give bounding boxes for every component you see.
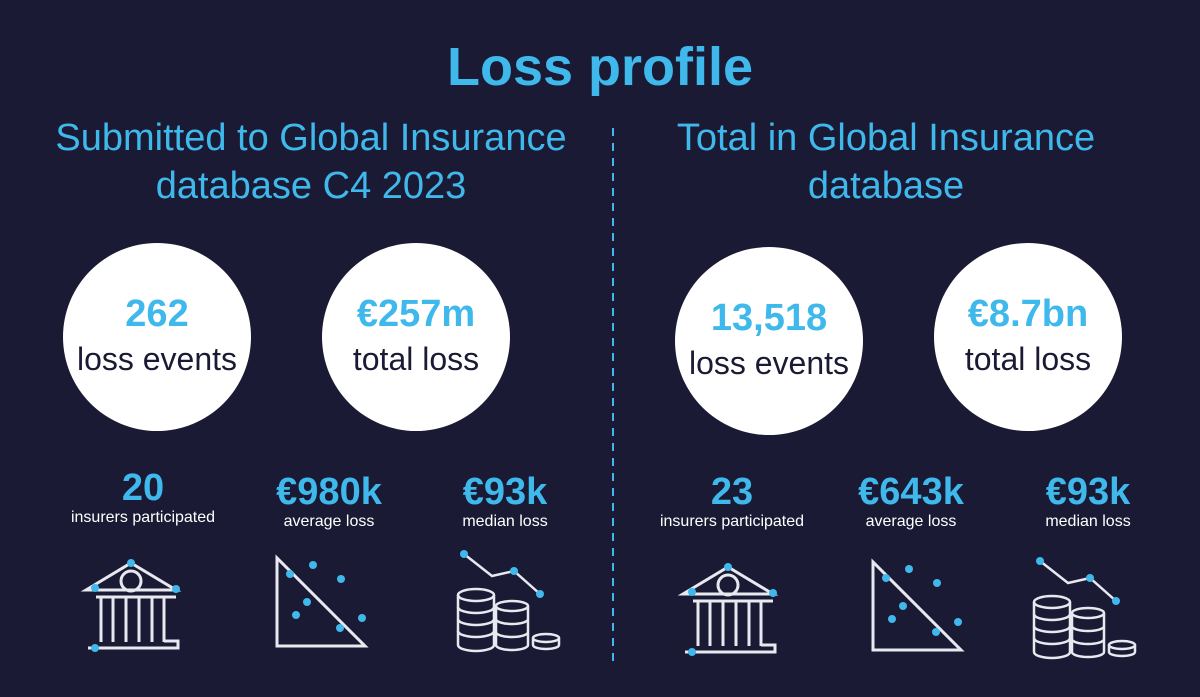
stat: 23 insurers <box>660 471 804 530</box>
circle: 262 loss events: loss events <box>77 341 237 377</box>
stat: €93k median: €93k <box>463 471 547 513</box>
subtitle left <box>55 117 567 207</box>
subtitle right <box>677 117 1095 207</box>
stat: €643k average: average loss <box>866 513 956 530</box>
stat: 20 insurers: insurers participated <box>71 509 215 526</box>
icon: coins right <box>1034 557 1135 658</box>
circle: 13,518 loss events <box>675 247 863 435</box>
icon: triangle scatter left <box>277 558 366 646</box>
title: Loss profile <box>447 37 753 97</box>
circle: €257m total loss <box>322 243 510 431</box>
circle: 262 loss events <box>63 243 251 431</box>
stat: €980k average: €980k <box>276 471 382 513</box>
stat: 20 insurers <box>71 467 215 526</box>
subtitle right: database <box>808 165 964 207</box>
subtitle left: database C4 2023 <box>156 165 466 207</box>
circle: €257m total loss: €257m <box>357 293 475 335</box>
stat: €93k median right: median loss <box>1045 513 1131 530</box>
stat: 23 insurers: 23 <box>711 471 753 513</box>
stat: €980k average: average loss <box>284 513 374 530</box>
circle: €8.7bn total loss: €8.7bn <box>968 293 1088 335</box>
circle: €8.7bn total loss: total loss <box>965 341 1091 377</box>
stat: 23 insurers: insurers participated <box>660 513 804 530</box>
subtitle right: Total in Global Insurance <box>677 117 1095 159</box>
icon: bank right <box>683 563 777 656</box>
stat: €93k median right: €93k <box>1046 471 1130 513</box>
icon: bank left <box>86 559 180 652</box>
stat: €643k average: €643k <box>858 471 964 513</box>
circle: 13,518 loss events: 13,518 <box>711 297 827 339</box>
subtitle left: Submitted to Global Insurance <box>55 117 567 159</box>
icon: coins left <box>458 550 559 651</box>
stat: 20 insurers: 20 <box>122 467 164 509</box>
circle: €8.7bn total loss <box>934 243 1122 431</box>
circle: 13,518 loss events: loss events <box>689 345 849 381</box>
stat: €93k median: median loss <box>462 513 548 530</box>
icon: triangle scatter right <box>873 562 962 650</box>
circle: 262 loss events: 262 <box>125 293 189 335</box>
circle: €257m total loss: total loss <box>353 341 479 377</box>
